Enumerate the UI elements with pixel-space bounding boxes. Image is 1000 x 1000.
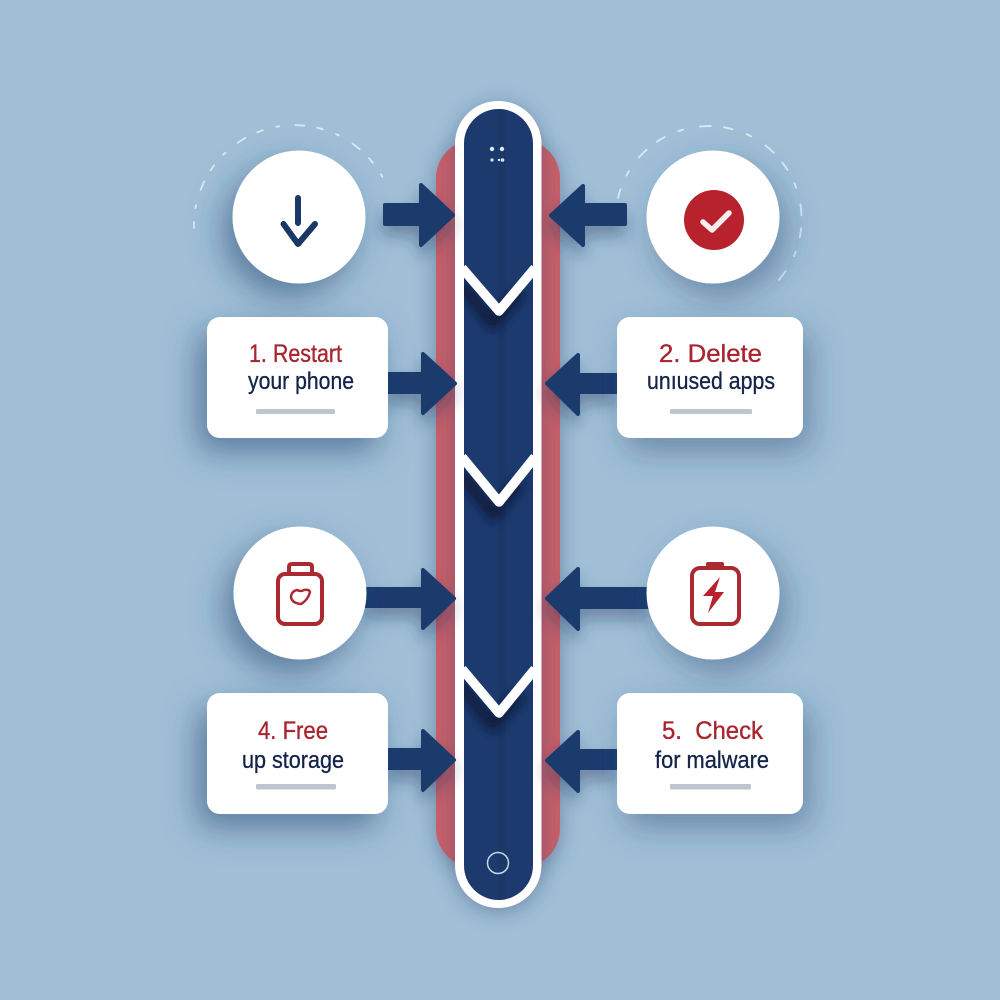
grey rule — [670, 409, 752, 414]
arrow: card 1 — [388, 354, 455, 413]
chevron shadows — [460, 284, 520, 725]
card: step 2 — [617, 317, 803, 438]
circle background — [234, 526, 366, 660]
grey rule — [670, 784, 751, 790]
card: step 4 — [207, 693, 388, 814]
arrow: top left circle — [385, 185, 453, 245]
card background — [617, 317, 803, 438]
icon: down arrow — [284, 198, 315, 244]
icon circle: charging battery — [646, 526, 780, 660]
circle background — [232, 150, 366, 284]
chevron 1 — [462, 268, 535, 311]
arrow: card 4 — [388, 731, 454, 790]
home button ring — [488, 852, 508, 874]
card: step 5 — [617, 693, 803, 814]
central phone bar — [455, 101, 542, 908]
icon circle: check mark — [646, 150, 780, 284]
arrow: lower right circle — [547, 569, 648, 629]
card: step 1 — [207, 317, 388, 438]
bar centre strip — [499, 109, 506, 900]
step title: 4. Free — [258, 717, 328, 745]
card background — [207, 317, 388, 438]
icon: check — [703, 213, 729, 230]
icon circle: storage battery — [234, 526, 366, 660]
grey rule — [256, 409, 335, 414]
bar navy fill — [464, 109, 533, 900]
arrow: card 2 — [547, 355, 617, 414]
icon: battery blob — [291, 590, 310, 604]
circle background — [646, 526, 780, 660]
dashed arc: top right — [618, 126, 802, 288]
speaker dots — [490, 147, 504, 162]
icon: battery outline — [278, 574, 322, 624]
step text: unıused apps — [647, 368, 775, 395]
red backing band — [436, 140, 560, 867]
arrow: card 5 — [547, 732, 617, 791]
bar white outline — [455, 101, 542, 908]
arrow: lower left circle — [366, 570, 454, 628]
icon: battery cap — [289, 564, 312, 573]
card background — [617, 693, 803, 814]
grey rule — [256, 784, 336, 790]
icon circle: download arrow — [232, 150, 366, 284]
step title: 2. Delete — [659, 340, 762, 368]
circle background — [646, 150, 780, 284]
step text: for malware — [655, 747, 769, 774]
step text: your phone — [248, 368, 354, 395]
chevron 3 — [462, 669, 535, 713]
card background — [207, 693, 388, 814]
icon: battery outline — [692, 568, 739, 624]
step title: 5. Check — [662, 717, 763, 745]
icon: lightning bolt — [703, 577, 724, 613]
red badge — [684, 190, 744, 250]
step title: 1. Restart — [249, 340, 342, 368]
arrow: top right circle — [551, 186, 625, 245]
step text: up storage — [242, 747, 344, 774]
chevron 2 — [462, 457, 535, 502]
icon: battery cap — [706, 562, 724, 567]
dashed arc: top left — [194, 125, 384, 228]
